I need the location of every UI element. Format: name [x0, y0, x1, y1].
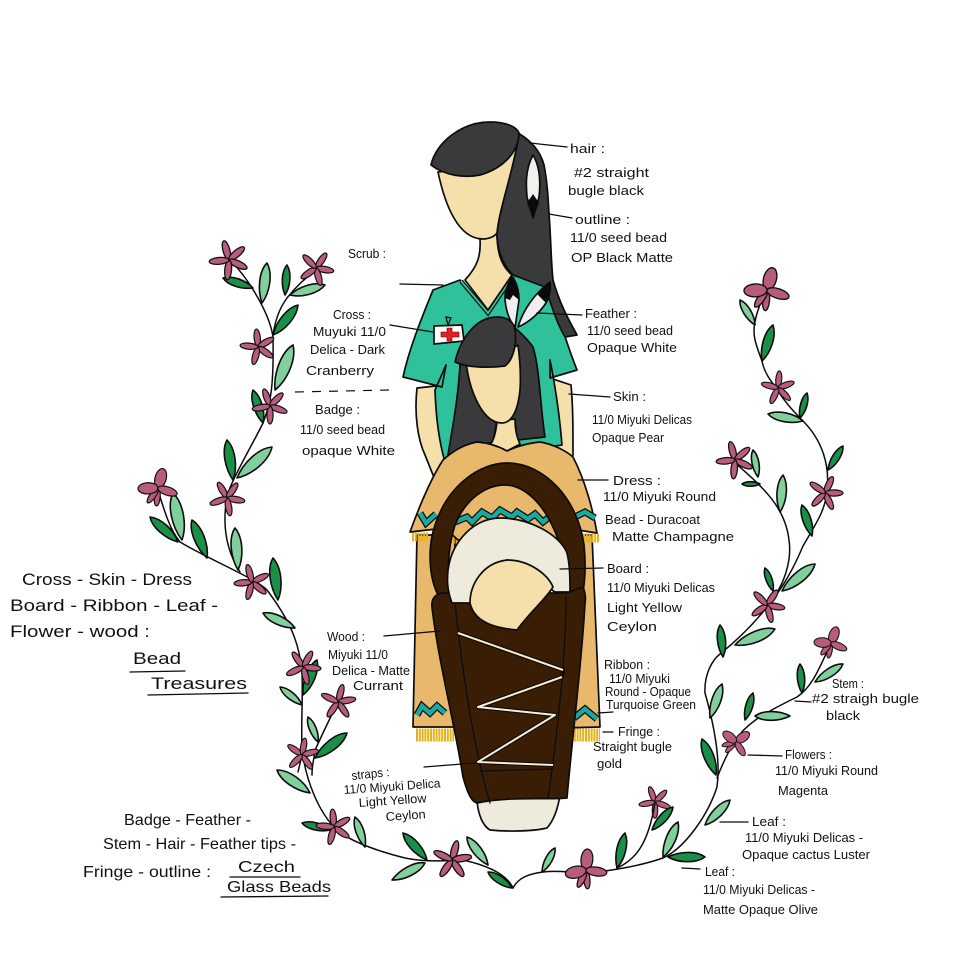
heading: Bead Treasures list: Bead — [133, 649, 181, 668]
label: flowers: 11/0 Miyuki Round — [775, 764, 878, 778]
label: ribbon: Round - Opaque — [605, 685, 691, 699]
label: fringe: Fringe : — [618, 725, 660, 739]
label: leaf dark — [682, 865, 818, 917]
label: fringe: gold — [597, 757, 622, 771]
label: wood: Wood : — [327, 630, 365, 644]
dress sleeve left — [413, 535, 455, 727]
label: board: Light Yellow — [607, 601, 683, 615]
label: wood: Currant — [353, 679, 404, 693]
label: cross: Cross : — [333, 308, 371, 322]
daughter figure — [448, 317, 545, 455]
label: fringe — [593, 725, 672, 771]
heading: Czech Glass Beads list: Glass Beads — [227, 879, 331, 896]
left vine — [138, 237, 673, 891]
label: dress: Bead - Duracoat — [605, 513, 701, 527]
scrub top — [403, 275, 577, 462]
heading: Bead Treasures list: Flower - wood : — [10, 622, 150, 641]
label: straps: Ceylon — [385, 807, 426, 824]
label: board: 11/0 Miyuki Delicas — [607, 581, 715, 595]
badge — [434, 317, 464, 344]
mother arms — [416, 378, 573, 480]
heading: Bead Treasures list: Cross - Skin - Dress — [22, 570, 192, 589]
dress sleeve right — [555, 535, 600, 728]
wooden arch — [430, 463, 585, 598]
label: leaf dark: Matte Opaque Olive — [703, 903, 818, 917]
label: feather — [537, 307, 677, 355]
heading: Czech Glass Beads list: Badge - Feather - — [124, 812, 251, 829]
daughter neck — [490, 419, 520, 451]
label: fringe: Straight bugle — [593, 740, 672, 754]
label: cross: Cranberry — [306, 364, 375, 378]
label: outline: 11/0 seed bead — [570, 231, 667, 245]
label: hair: bugle black — [568, 184, 645, 198]
fringe upper — [412, 537, 599, 539]
label: leaf light: Opaque cactus Luster — [742, 848, 870, 862]
label: stem: Stem : — [832, 677, 864, 691]
label: ribbon — [598, 658, 696, 713]
label: hair: #2 straight — [574, 166, 650, 180]
hair feather — [526, 155, 540, 218]
daughter long hair — [448, 328, 545, 455]
label: skin — [569, 390, 692, 445]
scrub collar — [461, 276, 513, 313]
left vine flowers — [138, 237, 673, 888]
label: skin: Skin : — [613, 390, 646, 404]
label: dress — [578, 474, 734, 544]
label: wood: Delica - Matte — [332, 664, 410, 678]
heading: Bead Treasures list: Treasures — [151, 674, 247, 693]
label: badge: opaque White — [302, 444, 395, 458]
label: badge: 11/0 seed bead — [300, 423, 385, 437]
label: ribbon: Ribbon : — [604, 658, 650, 672]
red cross — [441, 328, 459, 341]
label: straps — [343, 763, 475, 824]
label: flowers: Flowers : — [785, 748, 832, 762]
straps — [458, 633, 563, 765]
label: cross: Muyuki 11/0 — [313, 325, 386, 339]
heading: Czech Glass Beads list — [83, 812, 331, 897]
label: flowers — [748, 748, 878, 798]
label: cross — [306, 308, 433, 378]
label: outline: outline : — [575, 213, 630, 227]
label: straps: straps : — [351, 765, 390, 783]
label: dress: Dress : — [613, 474, 661, 488]
mother face — [438, 140, 518, 239]
label: dress: 11/0 Miyuki Round — [603, 490, 716, 504]
label: feather: Feather : — [585, 307, 637, 321]
label: board: Ceylon — [607, 620, 657, 634]
label: scrub — [348, 247, 443, 285]
baby face — [470, 560, 553, 630]
cream headboard — [447, 518, 570, 603]
label: leaf dark: 11/0 Miyuki Delicas - — [703, 883, 815, 897]
fringe lower — [416, 728, 600, 742]
dress cape — [410, 442, 597, 540]
label: leaf dark: Leaf : — [705, 865, 735, 879]
label: dress: Matte Champagne — [612, 530, 734, 544]
label: ribbon: Turquoise Green — [606, 698, 696, 712]
label: wood — [327, 630, 440, 693]
right vine flowers — [561, 266, 850, 892]
label: cross: Delica - Dark — [310, 343, 386, 357]
label: board — [560, 562, 715, 634]
heading: Czech Glass Beads list: Fringe - outline : — [83, 864, 211, 881]
mother neck — [465, 233, 512, 310]
label: feather: 11/0 seed bead — [587, 324, 673, 338]
right vine leaves — [539, 298, 846, 874]
label: skin: Opaque Pear — [592, 431, 664, 445]
label: scrub: Scrub : — [348, 247, 386, 261]
label: outline: OP Black Matte — [571, 251, 673, 265]
label: flowers: Magenta — [778, 784, 828, 798]
label: ribbon: 11/0 Miyuki — [609, 672, 670, 686]
label: straps: 11/0 Miyuki Delica — [343, 776, 441, 797]
label: stem — [795, 677, 919, 723]
board body — [432, 587, 585, 803]
mother figure — [403, 122, 577, 480]
label: badge — [295, 390, 395, 458]
label: outline — [549, 213, 673, 265]
heading: Czech Glass Beads list: Czech — [238, 859, 295, 876]
label: badge: Badge : — [315, 403, 360, 417]
label: board: Board : — [607, 562, 649, 576]
heading: Bead Treasures list — [10, 570, 248, 695]
right vine — [513, 266, 850, 892]
heading: Czech Glass Beads list: Stem - Hair - Feather tips - — [103, 836, 296, 853]
label: leaf light — [720, 815, 870, 862]
left vine leaves — [147, 262, 514, 891]
label: feather: Opaque White — [587, 341, 677, 355]
label: stem: #2 straigh bugle — [812, 692, 919, 706]
label: wood: Miyuki 11/0 — [328, 648, 388, 662]
bottom cream cap — [477, 795, 560, 831]
mother bangs — [431, 122, 519, 176]
zigzag bands — [417, 510, 597, 719]
board lines — [455, 597, 566, 803]
label: hair: hair : — [570, 142, 605, 156]
label: leaf light: Leaf : — [752, 815, 786, 829]
heading: Bead Treasures list: Board - Ribbon - Leaf - — [10, 596, 218, 615]
left vine stems — [158, 260, 513, 888]
feathers — [505, 277, 550, 328]
daughter face — [466, 345, 520, 423]
label: straps: Light Yellow — [358, 791, 428, 810]
dress and cradleboard — [410, 442, 600, 831]
right vine stems — [513, 289, 831, 888]
label: hair — [530, 142, 650, 198]
label: leaf light: 11/0 Miyuki Delicas - — [745, 831, 863, 845]
label: skin: 11/0 Miyuki Delicas — [592, 413, 692, 427]
mother long hair — [497, 133, 577, 337]
label: stem: black — [826, 709, 861, 723]
daughter bangs — [455, 317, 516, 367]
